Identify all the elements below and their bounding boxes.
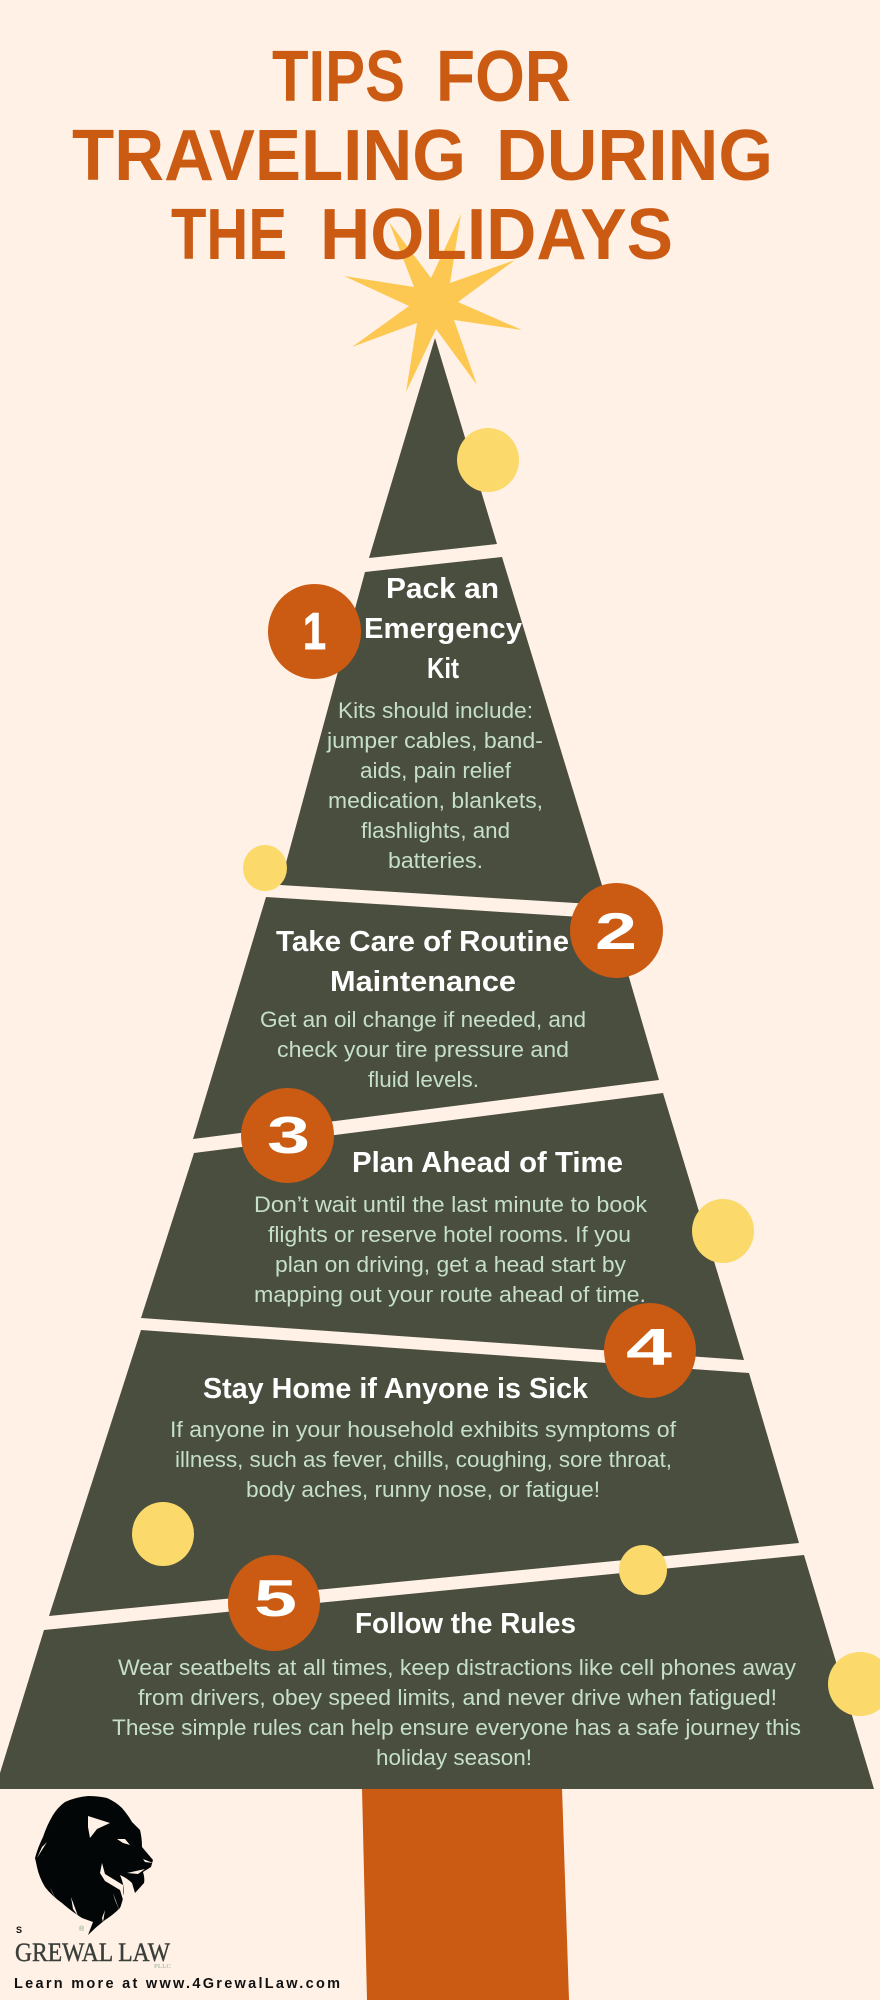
text: tip 3 body: flights or reserve hotel rooms. If you: [268, 1222, 631, 1247]
title: TIPS: [272, 37, 405, 117]
heading: pack an emergency kit: Pack an: [386, 573, 499, 605]
ornament: top: [457, 428, 519, 492]
heading: stay home if anyone is sick: Stay Home if Anyone is Sick: [203, 1373, 589, 1405]
text: tip 1 body: batteries.: [388, 848, 483, 873]
text: tip 2 body: Get an oil change if needed, and: [260, 1007, 586, 1032]
panel: tip 5: [112, 1555, 801, 1770]
trunk: [362, 1788, 569, 2000]
text: tip 4 body: If anyone in your household exhibits symptoms of: [170, 1417, 677, 1442]
badge 2: 2: [595, 903, 637, 961]
title: THE: [171, 195, 287, 275]
badge 4: [604, 1303, 696, 1398]
text: pllc: PLLC: [154, 1964, 171, 1970]
panel: tip 2: [260, 883, 663, 1092]
title: FOR: [436, 37, 571, 117]
badge 1: [268, 584, 361, 679]
text: firm name: GREWAL LAW: [15, 1938, 170, 1967]
ornament: right of tier 3: [692, 1199, 754, 1263]
text: s mark: S: [16, 1925, 22, 1935]
ornament: right of tier 5: [828, 1652, 880, 1716]
badge 5: [228, 1555, 320, 1651]
heading: follow the rules: Follow the Rules: [355, 1608, 576, 1640]
icon: lion head: [35, 1796, 153, 1935]
text: tip 3 body: plan on driving, get a head start by: [275, 1252, 627, 1277]
title: TRAVELING: [72, 116, 466, 196]
text: tip 3 body: [254, 1192, 648, 1307]
badge 2: [570, 883, 663, 978]
text: tip 1 body: medication, blankets,: [328, 788, 543, 813]
heading: take care of routine maintenance: Maintenance: [330, 966, 516, 998]
text: website: Learn more at www.4GrewalLaw.com: [14, 1976, 340, 1992]
text: tip 5 body: holiday season!: [376, 1745, 532, 1770]
text: tip 1 body: [326, 698, 543, 873]
text: tip 4 body: illness, such as fever, chills, coughing, sore throat,: [175, 1447, 672, 1472]
panel: tip 1: [268, 573, 543, 873]
badge 4: 4: [626, 1319, 672, 1377]
text: tip 3 body: mapping out your route ahead of time.: [254, 1282, 646, 1307]
heading: take care of routine maintenance: Take Care of Routine: [276, 926, 569, 958]
text: tip 2 body: [260, 1007, 586, 1092]
badge 3: [241, 1088, 334, 1183]
heading: plan ahead of time: Plan Ahead of Time: [352, 1147, 623, 1179]
badge 1: 1: [303, 603, 326, 661]
heading: pack an emergency kit: Kit: [427, 653, 459, 685]
logo: grewal law: [14, 1796, 340, 1992]
text: tip 1 body: Kits should include:: [338, 698, 533, 723]
text: tip 2 body: check your tire pressure and: [277, 1037, 569, 1062]
panel: tip 3: [241, 1088, 648, 1307]
heading: take care of routine maintenance: [276, 926, 569, 998]
tree: [0, 338, 874, 1789]
text: tip 4 body: body aches, runny nose, or fatigue!: [246, 1477, 600, 1502]
badge 3: 3: [267, 1107, 310, 1165]
ornament: left of tier 1: [243, 845, 287, 891]
text: registered mark: ®: [79, 1925, 85, 1933]
panel: tip 4: [170, 1303, 696, 1502]
text: tip 1 body: jumper cables, band-: [326, 728, 543, 753]
ornament: on band 5: [619, 1545, 667, 1595]
title: [72, 37, 773, 275]
title: DURING: [496, 116, 773, 196]
text: tip 5 body: These simple rules can help ensure everyone has a safe journey this: [112, 1715, 801, 1740]
ornament: left of tier 4: [132, 1502, 194, 1566]
text: tip 1 body: aids, pain relief: [360, 758, 512, 783]
text: tip 2 body: fluid levels.: [368, 1067, 479, 1092]
title: HOLIDAYS: [320, 195, 673, 275]
text: tip 5 body: from drivers, obey speed limits, and never drive when fatigued!: [138, 1685, 777, 1710]
heading: pack an emergency kit: [364, 573, 522, 685]
icon: star tree topper: [344, 214, 522, 392]
heading: pack an emergency kit: Emergency: [364, 613, 522, 645]
badge 5: 5: [254, 1570, 297, 1628]
text: tip 1 body: flashlights, and: [361, 818, 510, 843]
text: tip 5 body: Wear seatbelts at all times, keep distractions like cell phones away: [118, 1655, 797, 1680]
text: tip 5 body: [112, 1655, 801, 1770]
text: tip 4 body: [170, 1417, 677, 1502]
text: tip 3 body: Don’t wait until the last minute to book: [254, 1192, 648, 1217]
